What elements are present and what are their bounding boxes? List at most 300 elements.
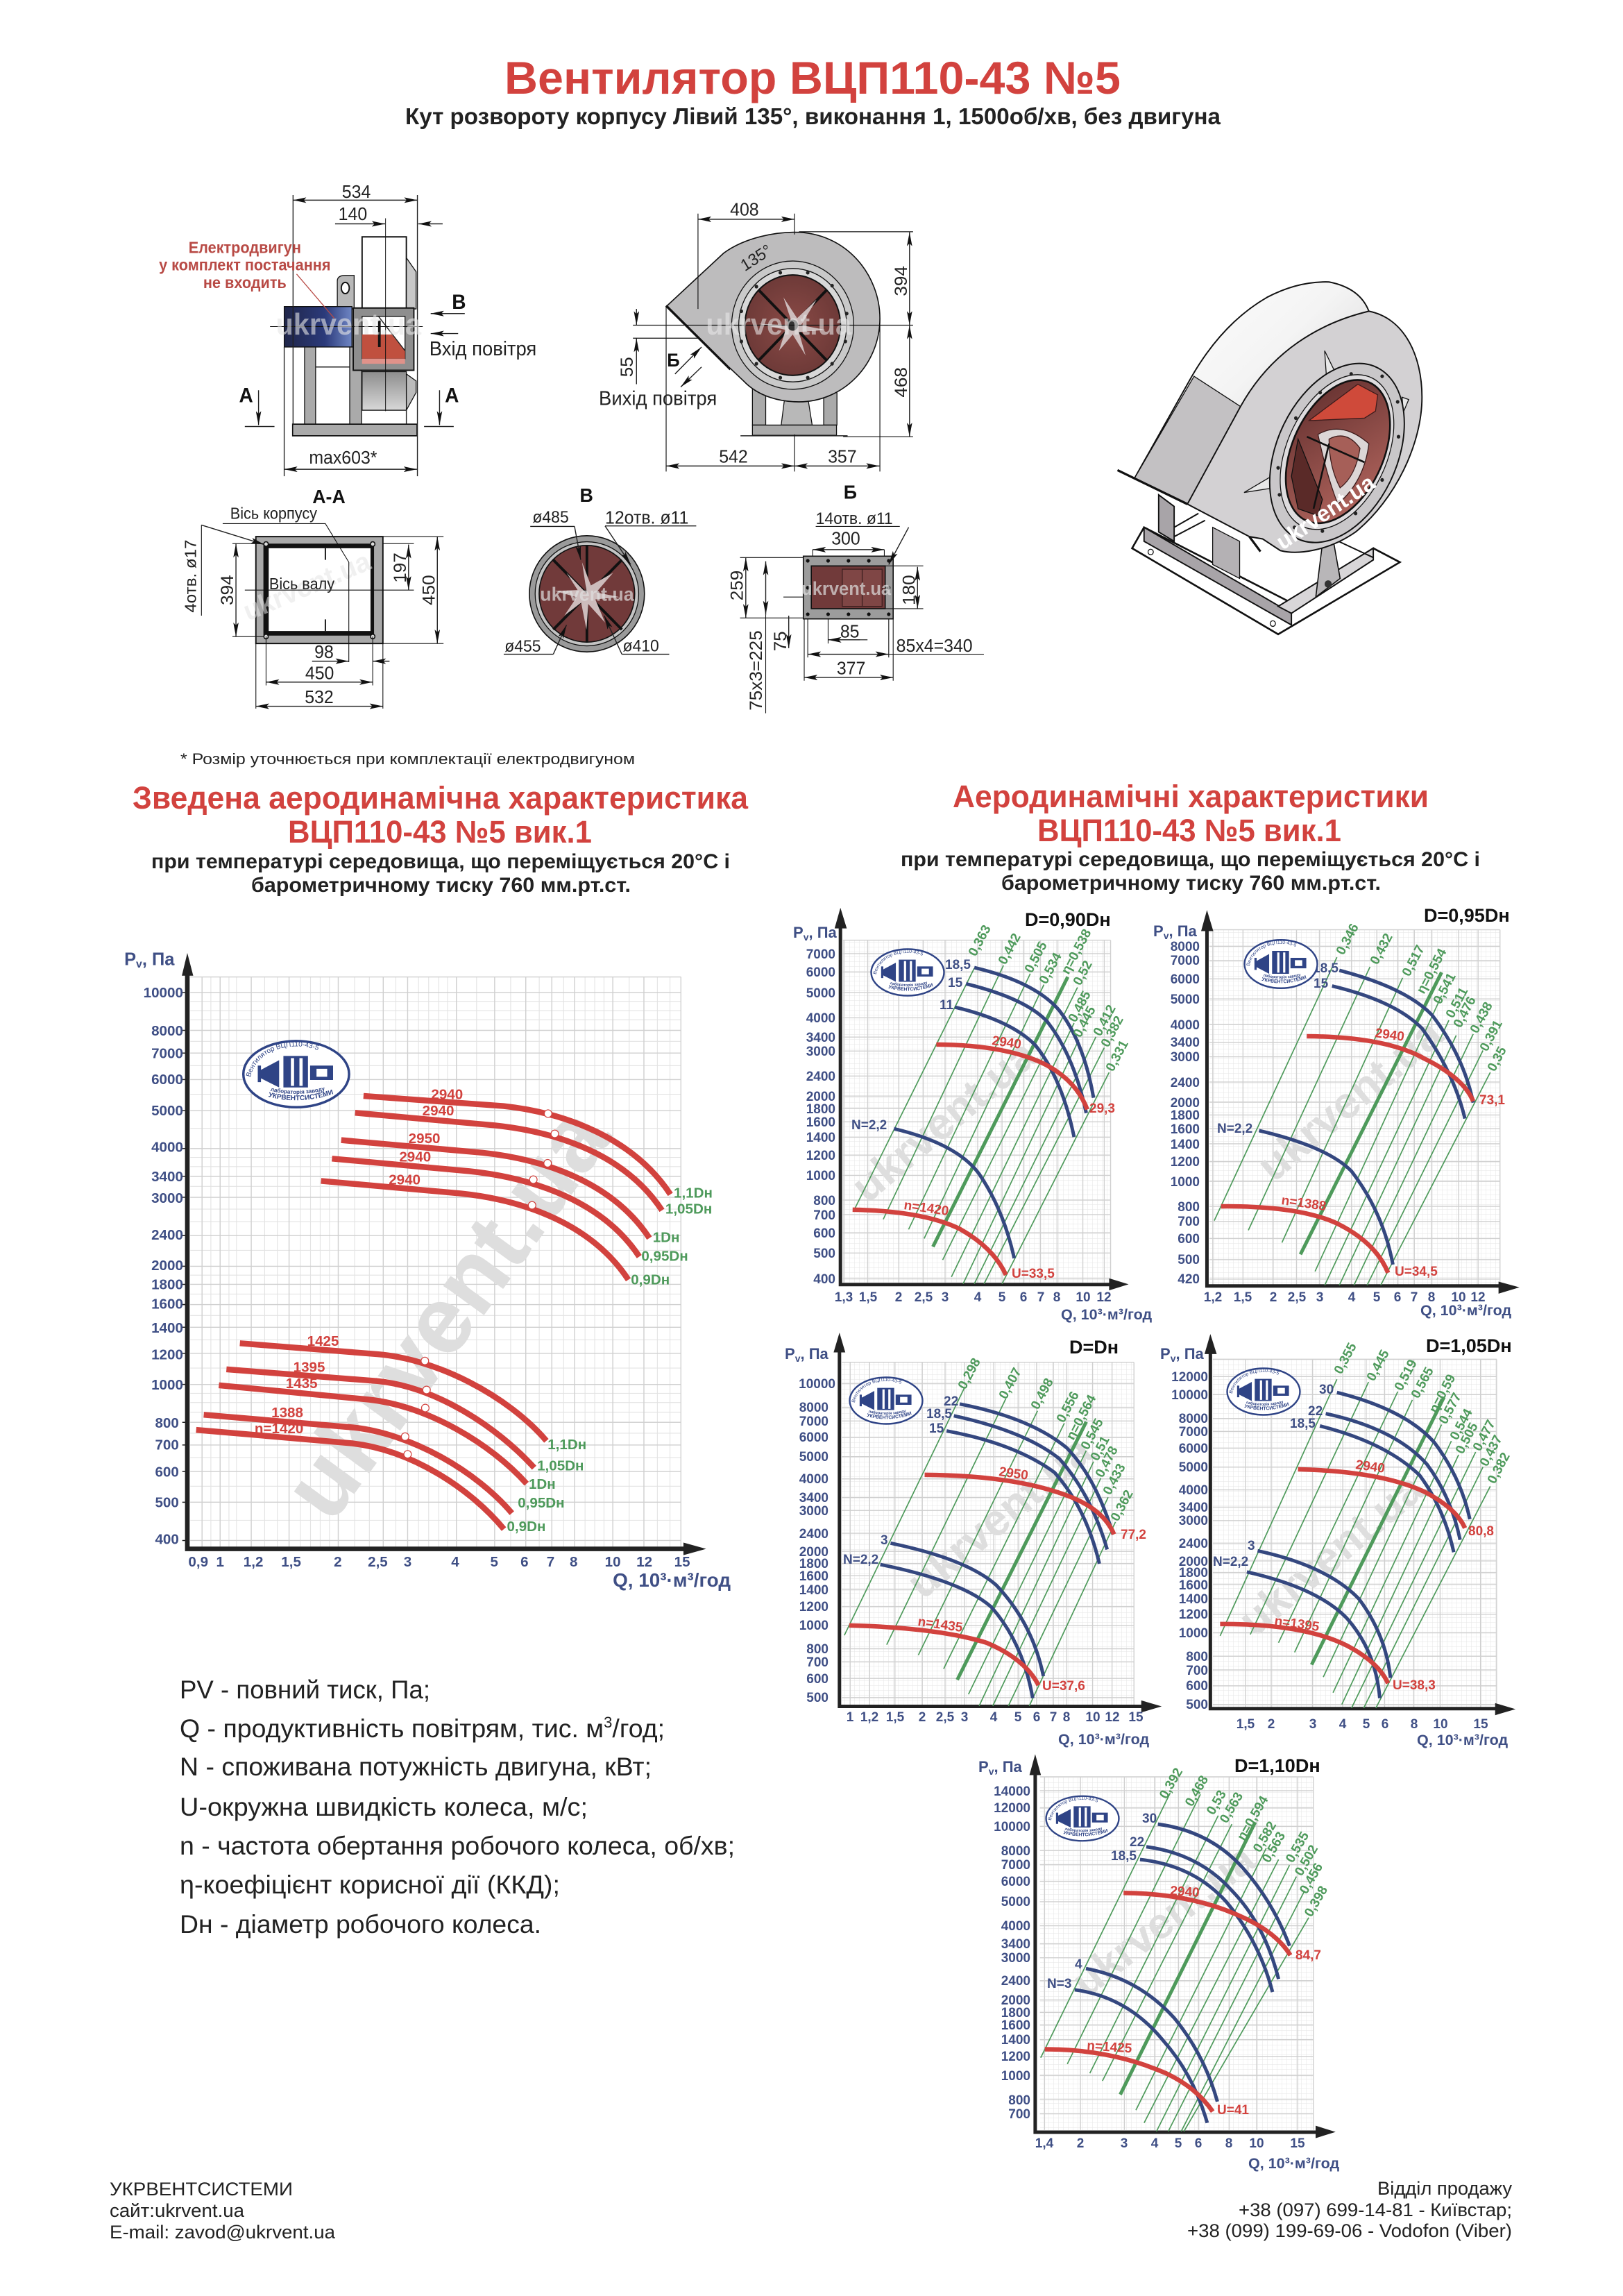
side view drawing: А bbox=[239, 385, 253, 407]
side view drawing: max603* bbox=[309, 448, 377, 468]
labels: v bbox=[1171, 1353, 1176, 1364]
footer: sales department: +38 (099) 199-69-06 - Vodofon (Viber) bbox=[1187, 2220, 1512, 2241]
labels: 12 bbox=[1096, 1290, 1112, 1305]
labels: 2950 bbox=[998, 1464, 1029, 1483]
side view drawing bbox=[159, 183, 536, 476]
legend: U-окружна швидкість колеса, м/с; bbox=[180, 1793, 588, 1821]
logo: Вентилятор ВЦП110-43-5 bbox=[1229, 1369, 1280, 1394]
labels: v bbox=[795, 1353, 801, 1364]
labels: 0,511 bbox=[1443, 985, 1471, 1020]
labels: 2,5 bbox=[936, 1710, 955, 1725]
labels: 0,363 bbox=[966, 923, 994, 959]
labels: 0,35 bbox=[1485, 1044, 1510, 1074]
leader arrows bbox=[553, 526, 631, 655]
grid bbox=[842, 1362, 1134, 1705]
labels: 0,331 bbox=[1103, 1038, 1132, 1074]
labels: 2,5 bbox=[915, 1290, 933, 1305]
labels: 0,476 bbox=[1451, 995, 1479, 1030]
side view drawing: Електродвигун bbox=[189, 239, 301, 257]
chart: D=1,10Dн bbox=[978, 1755, 1339, 2172]
labels: 8 bbox=[1063, 1710, 1070, 1725]
y axis labels: 1800 bbox=[151, 1277, 183, 1293]
front view drawing: 55 bbox=[618, 357, 637, 377]
axis titles: P bbox=[124, 950, 136, 970]
labels: 1800 bbox=[1171, 1108, 1200, 1123]
labels: 1200 bbox=[1001, 2050, 1030, 2064]
section A-A: 450 bbox=[420, 575, 439, 605]
labels: P bbox=[1160, 1345, 1171, 1362]
labels: N=2,2 bbox=[843, 1553, 878, 1567]
labels: N=2,2 bbox=[1217, 1122, 1252, 1136]
labels: 1600 bbox=[799, 1569, 829, 1584]
labels: n=1435 bbox=[917, 1614, 964, 1635]
labels: 6000 bbox=[799, 1430, 829, 1445]
watermark: ukrvent.ua bbox=[1229, 1462, 1433, 1646]
labels: 1400 bbox=[1179, 1592, 1208, 1607]
section A-A: Вісь корпусу bbox=[230, 505, 318, 523]
x axis labels: 1 bbox=[216, 1554, 224, 1570]
labels: 6000 bbox=[1171, 972, 1200, 987]
labels: η=0,538 bbox=[1059, 927, 1094, 977]
labels: 2000 bbox=[1001, 1993, 1030, 2008]
labels: 11 bbox=[940, 998, 954, 1013]
footer: company contacts: УКРВЕНТСИСТЕМИ bbox=[110, 2179, 293, 2200]
labels: 0,577 bbox=[1436, 1391, 1465, 1426]
labels: 2940 bbox=[1374, 1026, 1405, 1045]
y axis labels: 4000 bbox=[151, 1140, 183, 1156]
y axis labels: 3400 bbox=[151, 1169, 183, 1185]
logo: лабораторія заводу bbox=[890, 981, 927, 987]
footer: sales department: +38 (097) 699-14-81 - Київстар; bbox=[1239, 2200, 1512, 2220]
labels: 1800 bbox=[1001, 2006, 1030, 2020]
rpm labels: 2940 bbox=[399, 1149, 431, 1165]
labels: 2000 bbox=[1171, 1096, 1200, 1111]
logo: УКРВЕНТСИСТЕМИ bbox=[1261, 975, 1307, 983]
labels: 4 bbox=[1151, 2136, 1159, 2151]
labels: 1800 bbox=[799, 1557, 829, 1571]
labels: D=0,90Dн bbox=[1025, 909, 1111, 930]
labels: 8 bbox=[1411, 1717, 1418, 1732]
labels: 1,2 bbox=[1204, 1290, 1222, 1305]
labels: 800 bbox=[1178, 1200, 1200, 1215]
3D view of the fan bbox=[1117, 282, 1431, 634]
labels: 0,556 bbox=[1054, 1390, 1082, 1425]
labels: 0,456 bbox=[1297, 1861, 1326, 1896]
labels: 0,565 bbox=[1409, 1365, 1437, 1401]
labels: 1000 bbox=[1179, 1626, 1208, 1641]
watermark: ukrvent.ua bbox=[1063, 1834, 1264, 2007]
labels: 1,5 bbox=[1237, 1717, 1255, 1732]
labels: n=1395 bbox=[1273, 1614, 1320, 1635]
labels: 700 bbox=[1008, 2107, 1030, 2122]
section Б (outlet) bbox=[728, 481, 984, 714]
labels: Q, 10³·м³/год bbox=[1248, 2155, 1339, 2172]
labels: 0,498 bbox=[1028, 1376, 1057, 1412]
labels: 4000 bbox=[1179, 1483, 1208, 1498]
labels: , Па bbox=[800, 1345, 829, 1362]
chart: D=1,05Dн bbox=[1160, 1334, 1515, 1748]
labels: n=1425 bbox=[1087, 2038, 1132, 2057]
labels: 3400 bbox=[1001, 1937, 1030, 1952]
rpm labels: 2940 bbox=[423, 1103, 454, 1119]
logo: лабораторія заводу bbox=[1263, 973, 1300, 979]
section Б (outlet): ukrvent.ua bbox=[801, 577, 892, 599]
labels: 8 bbox=[1428, 1290, 1435, 1305]
left heading bbox=[133, 780, 749, 897]
labels: 1,5 bbox=[859, 1290, 878, 1305]
labels: 0,505 bbox=[1022, 939, 1051, 975]
curves for 1420 rpm group bbox=[196, 1343, 546, 1529]
labels: 1,3 bbox=[835, 1290, 853, 1305]
section A-A: Вісь валу bbox=[269, 575, 335, 593]
chart: D=0,90Dн bbox=[793, 908, 1152, 1323]
labels: 4000 bbox=[1171, 1018, 1200, 1033]
technical drawings group bbox=[159, 183, 984, 714]
y axis labels: 500 bbox=[155, 1495, 179, 1511]
labels: 22 bbox=[944, 1394, 958, 1409]
logo: Вентилятор ВЦП110-43-5 bbox=[246, 1043, 319, 1077]
flange and opening bbox=[1243, 339, 1431, 566]
labels: 3 bbox=[1309, 1717, 1316, 1732]
diameter labels: 0,9Dн bbox=[631, 1272, 670, 1288]
labels: 12 bbox=[1105, 1710, 1120, 1725]
inlet flange bbox=[353, 308, 414, 370]
axes, efficiency lines and curves bbox=[835, 908, 1128, 1290]
labels: U=37,6 bbox=[1042, 1679, 1085, 1694]
watermark: ukrvent.ua bbox=[897, 1425, 1101, 1608]
labels bbox=[978, 1755, 1339, 2172]
logo bbox=[1226, 1367, 1301, 1416]
labels: 7000 bbox=[806, 947, 835, 962]
curve label under logo: 18,5 bbox=[1313, 961, 1339, 976]
labels: 420 bbox=[1178, 1272, 1200, 1287]
labels: 2400 bbox=[1179, 1537, 1208, 1551]
labels: 5000 bbox=[799, 1450, 829, 1464]
rpm labels: 1395 bbox=[294, 1360, 325, 1376]
section A-A: 98 bbox=[314, 642, 334, 662]
labels: 3000 bbox=[1171, 1050, 1200, 1065]
summary chart bbox=[124, 950, 731, 1591]
section B (inlet): 12отв. ø11 bbox=[605, 508, 688, 528]
labels: 3400 bbox=[1179, 1501, 1208, 1515]
labels: n=1420 bbox=[903, 1198, 950, 1219]
labels: 0,412 bbox=[1091, 1003, 1119, 1038]
logo: Вентилятор ВЦП110-43-5 bbox=[1048, 1796, 1098, 1820]
labels: 0,477 bbox=[1470, 1418, 1499, 1453]
rpm labels: 2940 bbox=[389, 1172, 420, 1188]
right heading: ВЦП110-43 №5 вик.1 bbox=[1037, 813, 1341, 848]
labels: 1400 bbox=[806, 1131, 835, 1145]
labels: v bbox=[989, 1766, 994, 1777]
labels: 1200 bbox=[799, 1600, 829, 1614]
labels: 0,468 bbox=[1182, 1773, 1212, 1809]
labels: U=34,5 bbox=[1395, 1265, 1438, 1279]
labels: 0,382 bbox=[1098, 1014, 1127, 1049]
logo: лабораторія заводу bbox=[1064, 1827, 1102, 1832]
logo bbox=[1243, 939, 1318, 989]
section A-A: 394 bbox=[219, 575, 237, 605]
labels: 0,298 bbox=[955, 1356, 984, 1392]
y axis labels: 3000 bbox=[151, 1190, 183, 1206]
section Б (outlet): 75 bbox=[771, 631, 790, 651]
labels: n=1388 bbox=[1280, 1193, 1327, 1214]
labels: P bbox=[793, 924, 804, 941]
3D view of the fan: ukrvent.ua bbox=[1271, 469, 1379, 555]
right heading bbox=[901, 779, 1480, 895]
labels: 15 bbox=[1128, 1710, 1144, 1725]
labels: 10000 bbox=[994, 1820, 1030, 1834]
labels: 0,505 bbox=[1453, 1420, 1481, 1456]
labels: 10 bbox=[1085, 1710, 1101, 1725]
labels: 8000 bbox=[1001, 1844, 1030, 1859]
labels: 800 bbox=[806, 1642, 829, 1657]
labels: 2400 bbox=[799, 1527, 829, 1542]
labels: 1600 bbox=[1001, 2018, 1030, 2033]
labels: 10000 bbox=[799, 1377, 835, 1392]
labels: 12000 bbox=[1171, 1370, 1208, 1385]
labels: 8000 bbox=[799, 1401, 829, 1415]
labels: 10 bbox=[1433, 1717, 1448, 1732]
rpm labels: n=1420 bbox=[255, 1421, 303, 1437]
labels: 2400 bbox=[1001, 1974, 1030, 1989]
labels: 5000 bbox=[1001, 1895, 1030, 1909]
labels: U=38,3 bbox=[1393, 1678, 1436, 1693]
labels: N=3 bbox=[1047, 1977, 1071, 1991]
left heading: Зведена аеродинамічна характеристика bbox=[133, 780, 749, 816]
labels: 0,346 bbox=[1334, 922, 1362, 957]
y axis labels: 2400 bbox=[151, 1227, 183, 1243]
labels: 0,445 bbox=[1364, 1347, 1393, 1383]
dimension arrows bbox=[746, 527, 917, 677]
labels: U=33,5 bbox=[1012, 1267, 1055, 1281]
labels: 600 bbox=[1186, 1679, 1208, 1694]
legend: Q - продуктивність повітрям, тис. м bbox=[180, 1714, 598, 1743]
labels: 700 bbox=[1186, 1664, 1208, 1678]
section A-A: 197 bbox=[391, 552, 410, 583]
labels: 800 bbox=[1008, 2093, 1030, 2108]
labels: 500 bbox=[1178, 1253, 1200, 1267]
x axis labels: 15 bbox=[674, 1554, 690, 1570]
labels: 1,4 bbox=[1035, 2136, 1054, 2151]
y axis labels: 1200 bbox=[151, 1347, 183, 1362]
logo: УКРВЕНТСИСТЕМИ bbox=[888, 983, 933, 991]
labels: 0,407 bbox=[996, 1366, 1025, 1401]
x axis labels bbox=[188, 1554, 690, 1570]
labels: 5 bbox=[1363, 1717, 1370, 1732]
watermark: ukrvent.ua bbox=[262, 1086, 631, 1538]
labels: 700 bbox=[1178, 1215, 1200, 1229]
front view drawing: 135° bbox=[738, 241, 774, 275]
labels: η=0,594 bbox=[1234, 1793, 1272, 1843]
y axis labels: 1600 bbox=[151, 1297, 183, 1312]
subtitle: Кут розвороту корпусу Лівий 135°, виконання 1, 1500об/хв, без двигуна bbox=[405, 103, 1221, 129]
labels: 2940 bbox=[1354, 1458, 1386, 1476]
labels: 18,5 bbox=[1111, 1849, 1137, 1864]
diameter labels: 1Dн bbox=[529, 1476, 556, 1492]
footer: sales department: Відділ продажу bbox=[1377, 2178, 1513, 2199]
labels: Q, 10³·м³/год bbox=[1417, 1732, 1508, 1748]
labels: 7 bbox=[1411, 1290, 1418, 1305]
labels: 0,545 bbox=[1078, 1416, 1107, 1452]
diameter labels: 1,05Dн bbox=[665, 1201, 712, 1217]
x axis labels: 6 bbox=[520, 1554, 529, 1570]
labels: 3 bbox=[961, 1710, 968, 1725]
labels: 15 bbox=[1473, 1717, 1488, 1732]
section A-A: ukrvent.ua bbox=[239, 545, 375, 627]
labels: 3000 bbox=[799, 1504, 829, 1519]
section Б (outlet): 14отв. ø11 bbox=[816, 509, 893, 527]
labels: 0,485 bbox=[1066, 988, 1094, 1024]
labels: 6 bbox=[1195, 2136, 1202, 2151]
labels: 6000 bbox=[1179, 1442, 1208, 1456]
labels: v bbox=[1164, 930, 1169, 941]
labels: 1400 bbox=[799, 1583, 829, 1598]
diameter labels bbox=[507, 1185, 713, 1535]
labels: 18,5 bbox=[1290, 1417, 1316, 1431]
labels: 8 bbox=[1225, 2136, 1232, 2151]
labels: 600 bbox=[1178, 1232, 1200, 1247]
labels: 0,517 bbox=[1400, 943, 1428, 979]
left heading: барометричному тиску 760 мм.рт.ст. bbox=[251, 874, 631, 897]
labels: 1,5 bbox=[1234, 1290, 1252, 1305]
labels: 8000 bbox=[1179, 1412, 1208, 1426]
section Б (outlet): Б bbox=[844, 481, 857, 503]
labels: 4 bbox=[1075, 1957, 1082, 1972]
logo: Вентилятор ВЦП110-43-5 bbox=[873, 949, 923, 974]
labels: v bbox=[804, 931, 809, 943]
labels: η=0,59 bbox=[1427, 1372, 1459, 1415]
labels: 3400 bbox=[799, 1491, 829, 1505]
section Б (outlet): 377 bbox=[837, 659, 865, 679]
labels: 0,534 bbox=[1037, 950, 1065, 986]
labels: 7000 bbox=[1001, 1858, 1030, 1873]
labels: 1800 bbox=[1179, 1566, 1208, 1580]
side view drawing: у комплект постачання bbox=[159, 256, 331, 274]
side view drawing: В bbox=[452, 291, 466, 314]
labels: 8 bbox=[1053, 1290, 1060, 1305]
dimension arrows bbox=[636, 219, 910, 466]
labels: 2000 bbox=[799, 1545, 829, 1560]
labels: 0,355 bbox=[1332, 1340, 1360, 1376]
labels: 10 bbox=[1249, 2136, 1264, 2151]
section B (inlet): ø455 bbox=[504, 637, 541, 655]
y axis labels: 7000 bbox=[151, 1045, 183, 1061]
labels: 3 bbox=[1121, 2136, 1128, 2151]
labels: 7 bbox=[1050, 1710, 1057, 1725]
labels: 18,5 bbox=[926, 1407, 952, 1421]
legend: η-коефіцієнт корисної дії (ККД); bbox=[180, 1871, 560, 1899]
rpm labels: 1435 bbox=[286, 1376, 318, 1392]
footer: company contacts bbox=[110, 2179, 336, 2243]
section Б (outlet): 85 bbox=[840, 622, 860, 642]
labels: 4000 bbox=[799, 1472, 829, 1487]
side view drawing: А bbox=[445, 385, 459, 407]
labels: 700 bbox=[806, 1655, 829, 1670]
front view drawing: ukrvent.ua bbox=[706, 308, 851, 341]
x axis labels: 10 bbox=[605, 1554, 621, 1570]
labels: 4000 bbox=[1001, 1919, 1030, 1934]
labels: 3 bbox=[881, 1533, 888, 1548]
labels: 6000 bbox=[1001, 1875, 1030, 1889]
labels: 5000 bbox=[806, 986, 835, 1001]
labels: 4 bbox=[1348, 1290, 1356, 1305]
side view drawing: 534 bbox=[342, 183, 371, 202]
labels: 7000 bbox=[1179, 1425, 1208, 1440]
labels: 0,582 bbox=[1250, 1819, 1280, 1855]
scroll casing bbox=[666, 233, 880, 402]
labels: 2000 bbox=[806, 1090, 835, 1104]
logo: лабораторія заводу bbox=[1246, 1401, 1283, 1406]
labels: 6 bbox=[1033, 1710, 1040, 1725]
labels: 0,391 bbox=[1477, 1018, 1506, 1054]
y axis labels: 800 bbox=[155, 1415, 179, 1431]
title: Вентилятор ВЦП110-43 №5 bbox=[504, 52, 1121, 103]
labels: 6 bbox=[1382, 1717, 1388, 1732]
x axis labels: 4 bbox=[451, 1554, 459, 1570]
x axis labels: 5 bbox=[491, 1554, 498, 1570]
labels: 0,563 bbox=[1217, 1790, 1246, 1825]
section Б (outlet): 85x4=340 bbox=[897, 636, 973, 656]
grid bbox=[1209, 930, 1500, 1285]
diameter labels: 1,1Dн bbox=[547, 1437, 586, 1453]
labels: 1400 bbox=[1001, 2033, 1030, 2048]
labels: 2400 bbox=[1171, 1076, 1200, 1090]
y axis labels bbox=[144, 985, 183, 1547]
labels: 400 bbox=[813, 1272, 835, 1287]
labels: 5 bbox=[999, 1290, 1006, 1305]
front view drawing: 394 bbox=[892, 266, 911, 296]
labels: 12 bbox=[1470, 1290, 1486, 1305]
labels: Q, 10³·м³/год bbox=[1061, 1306, 1152, 1323]
x axis labels: 2 bbox=[334, 1554, 342, 1570]
labels: 2 bbox=[1270, 1290, 1277, 1305]
left heading: при температурі середовища, що переміщується 20°С і bbox=[151, 850, 730, 873]
labels: D=Dн bbox=[1069, 1337, 1119, 1358]
labels: 80,8 bbox=[1468, 1524, 1494, 1539]
logo: Вентилятор ВЦП110-43-5 bbox=[851, 1378, 902, 1403]
labels: 0,52 bbox=[1071, 959, 1096, 988]
diameter labels: 1,1Dн bbox=[674, 1185, 713, 1201]
y axis labels: 400 bbox=[155, 1531, 179, 1547]
x axis labels: 12 bbox=[636, 1554, 652, 1570]
axes, efficiency lines and curves bbox=[833, 1333, 1162, 1712]
section Б (outlet): 300 bbox=[831, 529, 860, 549]
front view drawing: 468 bbox=[892, 367, 911, 398]
labels: 0,478 bbox=[1093, 1444, 1121, 1480]
labels: 4000 bbox=[806, 1011, 835, 1026]
labels: 1600 bbox=[1171, 1122, 1200, 1137]
y axis labels: 10000 bbox=[144, 985, 183, 1001]
labels: P bbox=[785, 1345, 795, 1362]
x axis labels: 1,5 bbox=[281, 1554, 301, 1570]
front view drawing: Б bbox=[667, 350, 680, 371]
section B (inlet): В bbox=[580, 484, 593, 506]
labels: 3 bbox=[942, 1290, 949, 1305]
base frame bbox=[1132, 527, 1400, 634]
watermark: ukrvent.ua bbox=[842, 1029, 1046, 1212]
operating point markers bbox=[401, 1110, 559, 1458]
labels: 29,3 bbox=[1089, 1101, 1115, 1116]
side view drawing: не входить bbox=[203, 273, 287, 292]
labels: , Па bbox=[808, 924, 838, 941]
labels: 1600 bbox=[806, 1115, 835, 1130]
diameter labels: 1Dн bbox=[653, 1229, 679, 1245]
legend: PV - повний тиск, Па; bbox=[180, 1675, 430, 1704]
labels: 8000 bbox=[1171, 940, 1200, 954]
labels: P bbox=[978, 1758, 989, 1775]
labels: 2400 bbox=[806, 1070, 835, 1084]
labels: 18,5 bbox=[945, 958, 971, 972]
